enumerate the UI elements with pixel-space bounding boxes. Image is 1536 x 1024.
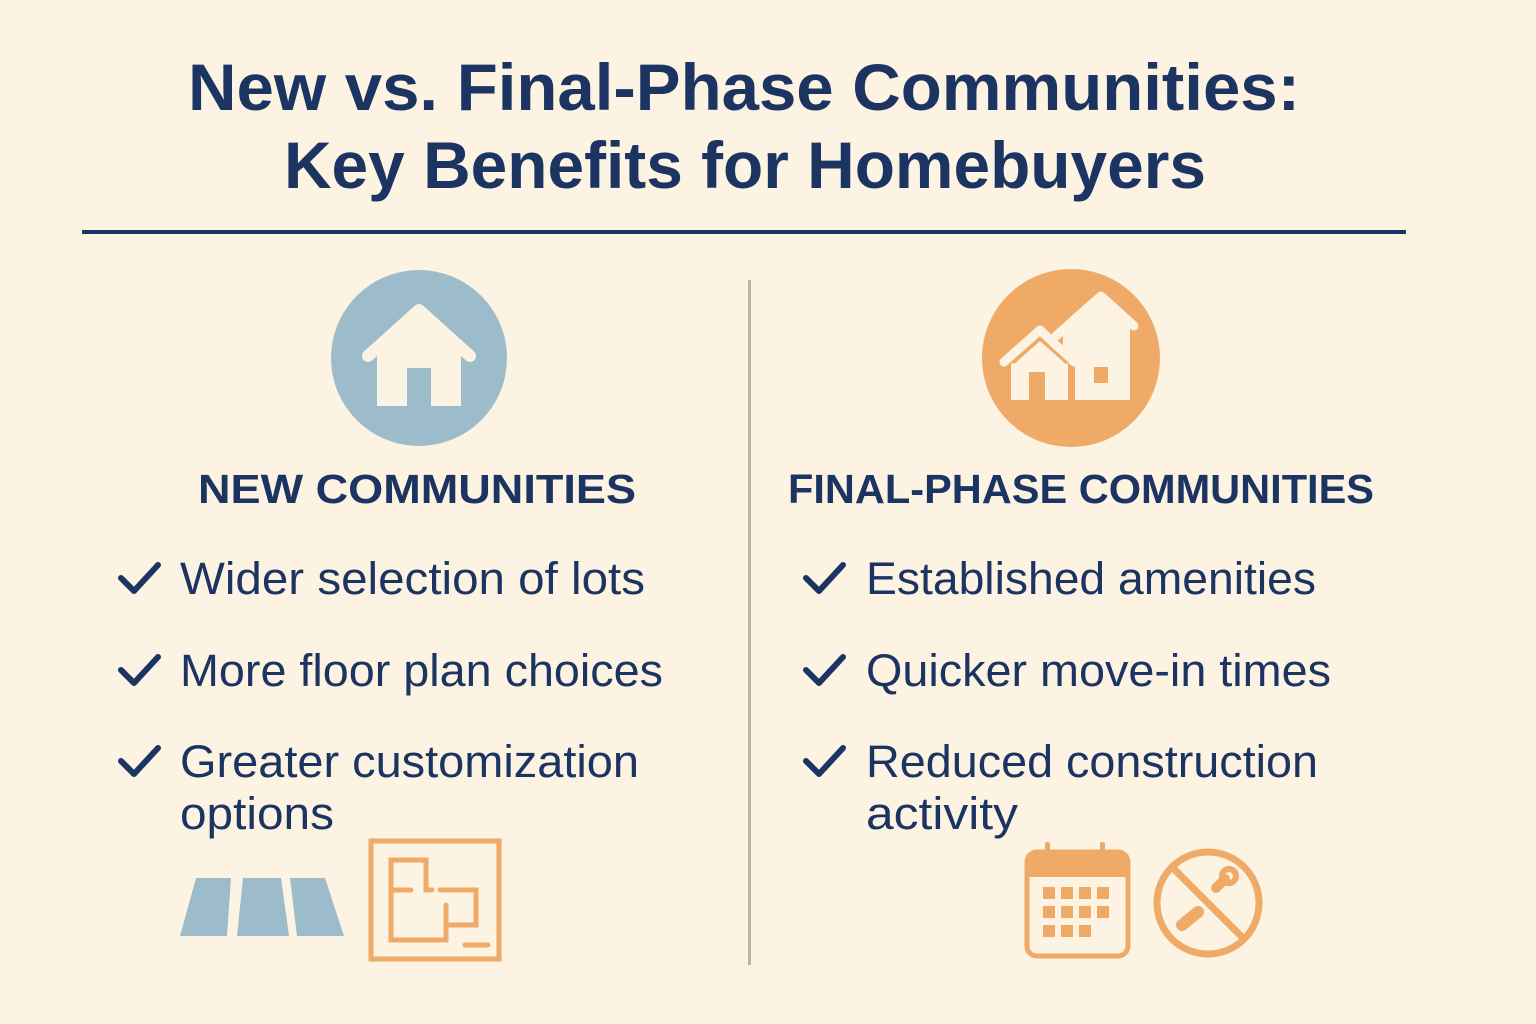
bullet list: new: More floor plan choices (180, 645, 663, 696)
panel: final-phase communities (788, 269, 1374, 956)
title: New vs. Final-Phase Communities: (188, 50, 1300, 124)
icon: lots (180, 878, 344, 936)
heading: final-phase communities: FINAL-PHASE COMMUNITIES (788, 466, 1374, 512)
heading: new communities: NEW COMMUNITIES (198, 466, 636, 512)
bullet list: new: Greater customization (180, 736, 639, 787)
icon: two houses (982, 269, 1160, 447)
icon: single house (331, 270, 507, 446)
panel: new communities (121, 270, 663, 959)
bullet list: final-phase: activity (866, 788, 1019, 839)
title: Key Benefits for Homebuyers (284, 128, 1206, 202)
bullet list: new (121, 553, 663, 839)
bullet list: final-phase: Established amenities (866, 553, 1316, 604)
title (188, 50, 1300, 202)
bullet list: final-phase: Quicker move-in times (866, 645, 1331, 696)
bullet list: final-phase: Reduced construction (866, 736, 1318, 787)
bullet list: final-phase (806, 553, 1331, 839)
icon: no construction (1157, 852, 1259, 954)
icon: calendar (1027, 842, 1128, 956)
bullet list: new: Wider selection of lots (180, 553, 645, 604)
bullet list: new: options (180, 788, 334, 839)
icon: floor plan (371, 841, 499, 959)
